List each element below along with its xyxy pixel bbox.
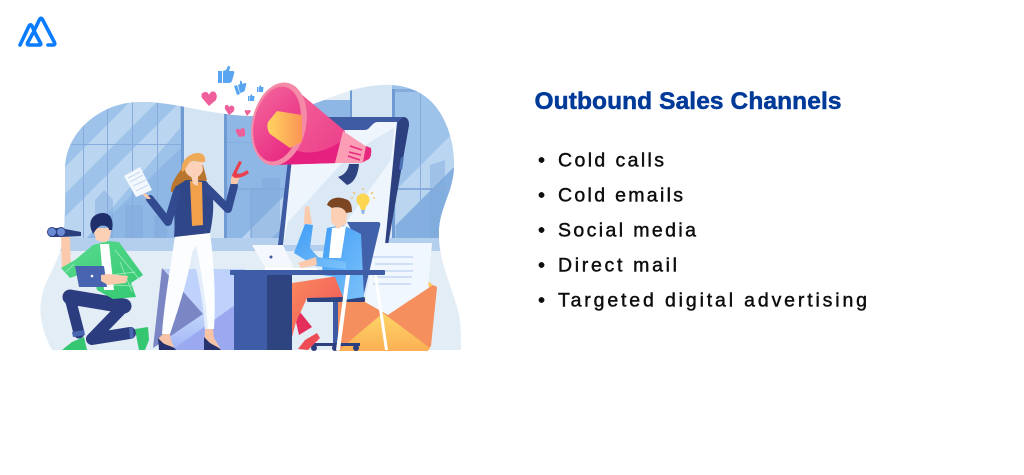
hair bbox=[182, 153, 205, 172]
desk bbox=[230, 270, 385, 275]
left arm bbox=[150, 192, 177, 222]
hands bbox=[231, 174, 240, 184]
flaps bbox=[388, 285, 437, 347]
hand bbox=[101, 274, 128, 285]
paper bbox=[124, 167, 152, 197]
tablet bbox=[75, 266, 107, 287]
person: man at desk bbox=[230, 198, 388, 351]
thumbs bbox=[218, 66, 264, 101]
trousers bbox=[162, 232, 215, 334]
blouse bbox=[190, 181, 203, 226]
person: kneeling man with binoculars and tablet bbox=[48, 213, 149, 350]
logo bbox=[20, 18, 55, 45]
magnet bbox=[232, 161, 249, 178]
shirt bbox=[329, 226, 346, 258]
item: cold calls: Cold calls bbox=[558, 150, 664, 172]
hearts bbox=[202, 91, 251, 137]
laptop bbox=[252, 245, 294, 269]
item: targeted digital advertising: Targeted digital advertising bbox=[558, 290, 867, 312]
shirt bbox=[61, 241, 143, 299]
floor rug bbox=[162, 269, 245, 350]
icon: light bulb bbox=[351, 188, 375, 214]
megaphone handle bbox=[338, 164, 359, 185]
background: office windows bbox=[40, 84, 461, 350]
person: woman with paper and magnet bbox=[124, 153, 249, 350]
chair bbox=[347, 222, 380, 302]
arms bbox=[294, 224, 346, 269]
arm bbox=[61, 237, 71, 270]
illustration: outbound marketing scene bbox=[30, 66, 470, 355]
envelope bbox=[333, 243, 437, 351]
window panes bbox=[60, 85, 462, 240]
binoculars bbox=[48, 228, 81, 237]
window frames bbox=[60, 89, 457, 240]
shoes bbox=[62, 337, 87, 350]
list: outbound channels bbox=[539, 150, 867, 312]
letter bbox=[365, 243, 432, 315]
megaphone bbox=[244, 77, 371, 185]
megaphone horn bbox=[272, 88, 345, 165]
head bbox=[93, 228, 111, 242]
desk legs bbox=[336, 275, 388, 350]
icons: likes and hearts bbox=[202, 66, 264, 137]
floor area bbox=[30, 251, 470, 351]
jacket bbox=[322, 225, 364, 300]
trousers bbox=[70, 297, 130, 339]
item: direct mail: Direct mail bbox=[558, 254, 677, 276]
hair back bbox=[171, 165, 207, 192]
phone bbox=[278, 117, 409, 245]
item: social media: Social media bbox=[558, 220, 696, 242]
rug fold bbox=[153, 268, 203, 348]
phone side buttons bbox=[399, 157, 404, 170]
shoe bbox=[298, 333, 320, 350]
item: cold emails: Cold emails bbox=[558, 184, 683, 206]
jacket bbox=[174, 180, 213, 237]
window pillars bbox=[181, 80, 395, 240]
megaphone cone bbox=[267, 111, 302, 148]
trousers bbox=[292, 276, 343, 337]
phone screen bbox=[283, 122, 397, 245]
heading: Outbound Sales Channels bbox=[534, 88, 842, 115]
right arm bbox=[207, 186, 234, 209]
hair bbox=[327, 198, 352, 213]
head bbox=[331, 207, 348, 229]
window sill bbox=[60, 238, 440, 251]
lower leg bbox=[296, 312, 312, 335]
cuffs bbox=[72, 327, 134, 339]
face bbox=[185, 162, 203, 186]
shoes bbox=[159, 334, 175, 350]
megaphone bell bbox=[244, 77, 314, 171]
megaphone collar bbox=[335, 131, 371, 163]
